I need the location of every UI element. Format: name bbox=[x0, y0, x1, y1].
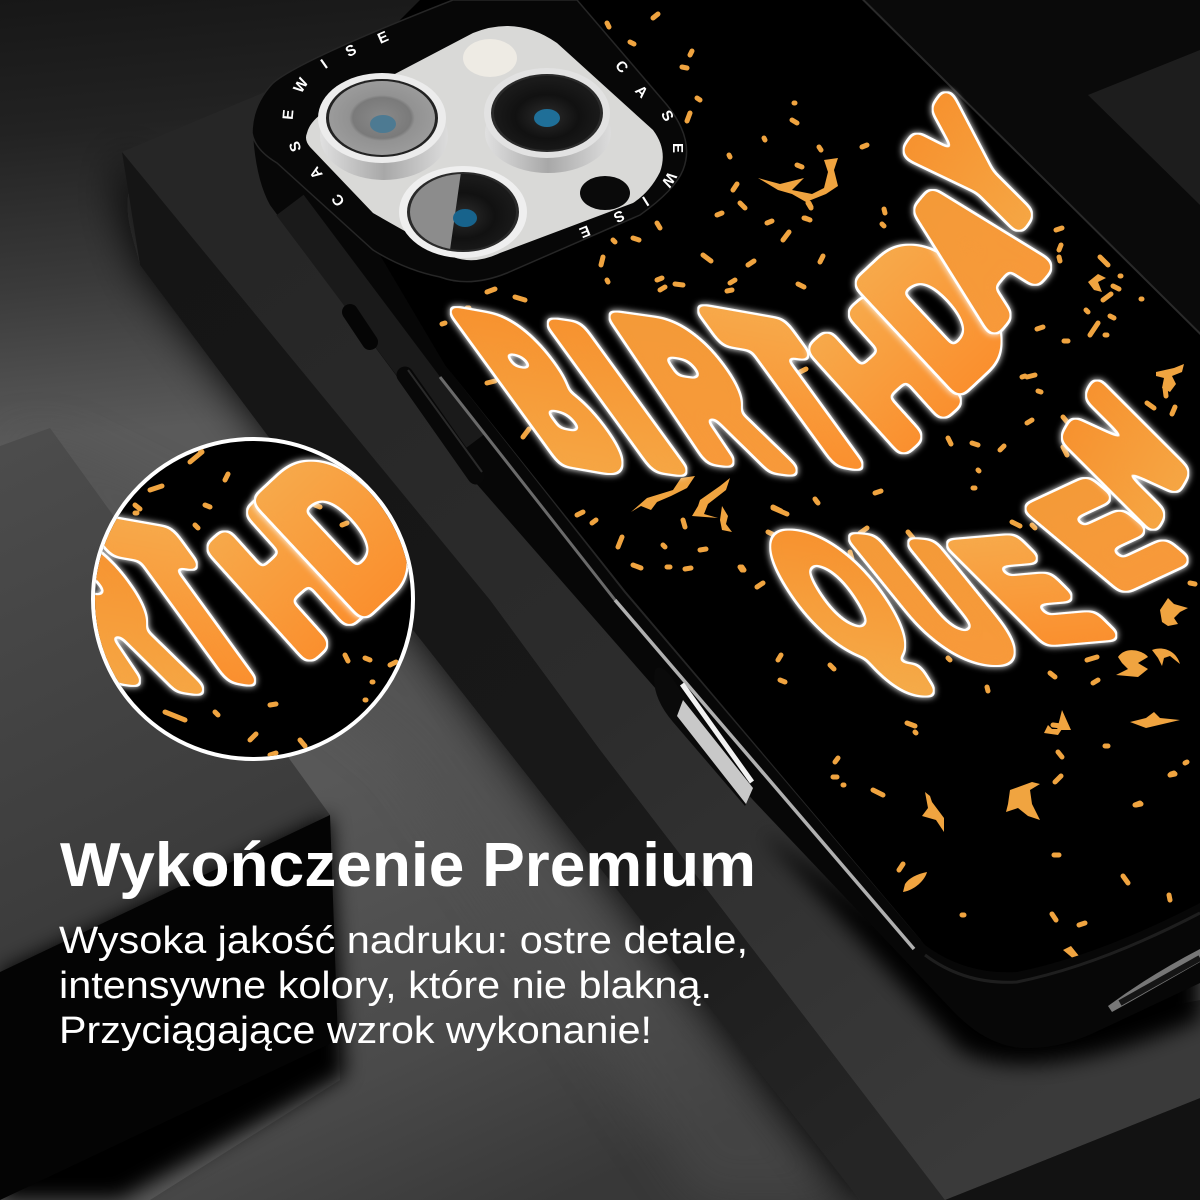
brand ring text: S bbox=[286, 139, 305, 154]
magnified confetti bbox=[135, 442, 396, 755]
BIRTHDAY artwork: H bbox=[784, 270, 987, 481]
brand ring text: I bbox=[318, 56, 331, 72]
brand ring text: I bbox=[639, 193, 652, 209]
camera plate bbox=[306, 26, 663, 260]
magnifier circle: H bbox=[180, 466, 394, 690]
brand ring text: S bbox=[611, 206, 627, 226]
magnifier circle: D bbox=[226, 413, 455, 648]
brand ring text: E bbox=[577, 221, 593, 241]
brand ring text bbox=[280, 28, 686, 241]
heading: Wykończenie Premium bbox=[60, 831, 756, 900]
BIRTHDAY artwork: D bbox=[828, 199, 1047, 424]
body text bbox=[59, 920, 748, 1052]
microphone sensor bbox=[580, 176, 630, 210]
brand ring text: W bbox=[657, 169, 680, 191]
body text: Wysoka jakość nadruku: ostre detale, bbox=[59, 920, 748, 962]
phone body bbox=[253, 0, 1200, 1048]
brand ring text: E bbox=[375, 28, 391, 48]
brand ring text: E bbox=[280, 109, 297, 120]
magnifier circle bbox=[91, 437, 415, 761]
magnifier circle: T bbox=[59, 477, 311, 726]
QUEEN artwork: U bbox=[820, 505, 1060, 695]
BIRTHDAY artwork: B bbox=[419, 272, 666, 513]
BIRTHDAY artwork: I bbox=[515, 284, 719, 510]
brand ring text: S bbox=[657, 107, 677, 124]
QUEEN artwork: Q bbox=[731, 496, 944, 695]
confetti pattern bbox=[442, 14, 1195, 968]
body text: intensywne kolory, które nie blakną. bbox=[59, 965, 712, 1007]
BIRTHDAY artwork: T bbox=[673, 271, 917, 509]
QUEEN artwork bbox=[731, 356, 1200, 695]
brand ring text: W bbox=[290, 74, 313, 96]
body text: Przyciągające wzrok wykonanie! bbox=[59, 1010, 652, 1052]
QUEEN artwork: E bbox=[917, 512, 1143, 669]
lens two bbox=[484, 68, 611, 173]
BIRTHDAY artwork: A bbox=[872, 144, 1075, 357]
BIRTHDAY artwork: Y bbox=[881, 70, 1070, 275]
BIRTHDAY artwork bbox=[419, 70, 1075, 513]
brand ring text: C bbox=[328, 190, 349, 209]
brand ring text: E bbox=[669, 143, 686, 153]
lens one bbox=[318, 73, 448, 180]
lens three bbox=[398, 166, 527, 258]
flash bbox=[463, 39, 517, 77]
phone buttons bbox=[350, 312, 1200, 1012]
brand ring text: A bbox=[306, 163, 326, 182]
printed back panel bbox=[300, 0, 1200, 972]
brand ring text: A bbox=[631, 82, 651, 102]
brand ring text: S bbox=[343, 41, 359, 61]
brand ring text: C bbox=[611, 57, 631, 77]
BIRTHDAY artwork: R bbox=[581, 278, 820, 509]
camera island bbox=[252, 0, 687, 282]
